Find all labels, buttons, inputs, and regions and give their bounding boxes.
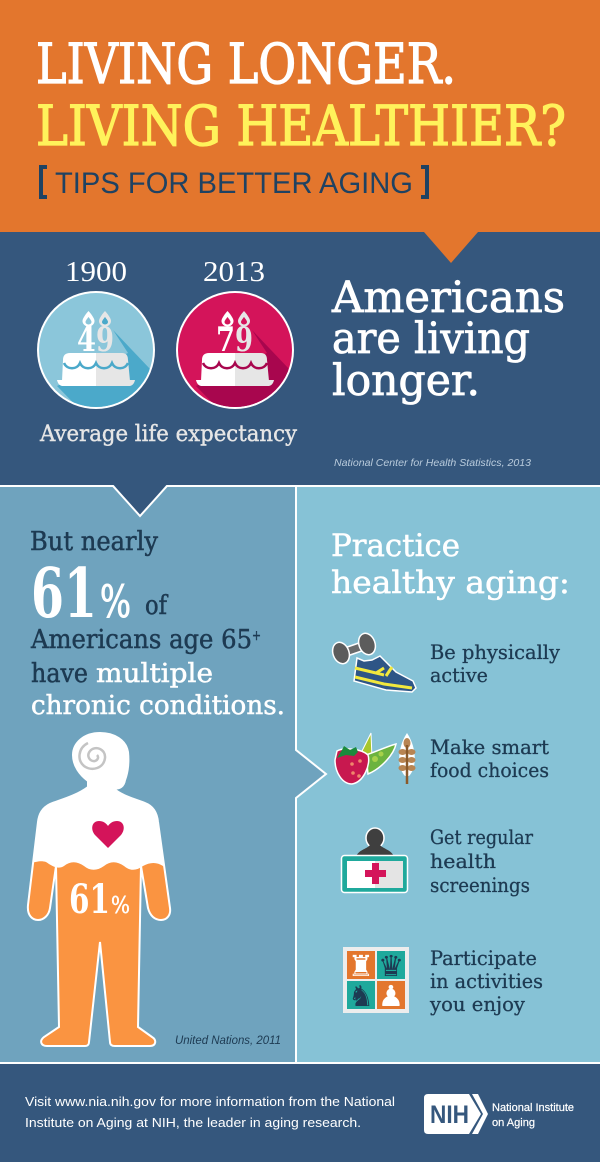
source: national center for health statistics: National Center for Health Statistics, 2013: [334, 457, 531, 469]
year 1900: 1900: [65, 256, 127, 288]
arrow: body panel into tips panel: [294, 750, 326, 798]
icon: cake 1900: 9: [96, 320, 114, 360]
logo: NIH: National Institute: [492, 1102, 574, 1114]
text: make smart food choices: food choices: [430, 758, 549, 782]
text: get regular health screenings: health: [430, 849, 496, 873]
footer: [0, 1064, 600, 1162]
title line 1: LIVING LONGER.: [36, 32, 456, 96]
heading: practice healthy aging: healthy aging:: [331, 565, 570, 601]
logo: NIH: NIH: [430, 1101, 469, 1129]
text: get regular health screenings: [430, 825, 533, 897]
heading: practice healthy aging: Practice: [331, 528, 460, 564]
text: be physically active: [430, 640, 561, 687]
heading: but nearly 61%: [30, 527, 285, 721]
footer text: [25, 1094, 395, 1130]
icon: cake 2013: 9: [235, 320, 253, 360]
icon: chess board: ♟: [378, 979, 404, 1013]
text: be physically active: Be physically: [430, 640, 561, 664]
text: participate in activities you enjoy: you enjoy: [429, 992, 526, 1016]
item: be physically active: [330, 631, 561, 692]
heading: but nearly 61%: multiple: [96, 659, 213, 689]
text: make smart food choices: [430, 735, 549, 782]
heading: but nearly 61%: %: [100, 577, 131, 628]
caption: average life expectancy: Average life expectancy: [39, 422, 298, 447]
icon: dumbbell and shoe: [330, 631, 416, 692]
right bracket: [421, 167, 427, 197]
heading: americans are living longer: are living: [332, 314, 530, 364]
heading: americans are living longer: [331, 273, 565, 406]
logo: NIH: on Aging: [492, 1117, 535, 1129]
heading: but nearly 61%: But nearly: [30, 527, 158, 557]
icon: person behind screen with cross: [342, 828, 408, 892]
heading: americans are living longer: longer.: [332, 356, 480, 406]
subtitle: TIPS FOR BETTER AGING: [55, 167, 413, 200]
icon: cake 2013: 7: [216, 320, 235, 360]
text: get regular health screenings: screenings: [430, 873, 530, 897]
icon: strawberry, pea pod and wheat: [335, 733, 416, 784]
panel: chronic conditions: [0, 485, 295, 1062]
label: 61% in body: %: [111, 893, 130, 919]
icon: chess board: ♜: [348, 949, 374, 983]
item: get regular health screenings: [342, 825, 533, 897]
heading: practice healthy aging: [331, 528, 570, 601]
heading: but nearly 61%: +: [252, 628, 261, 644]
icon: cake 1900: 4: [77, 320, 96, 360]
text: participate in activities you enjoy: [429, 946, 543, 1016]
figure: human body 61%: [26, 732, 172, 1047]
heading: but nearly 61%: have: [31, 659, 88, 689]
text: participate in activities you enjoy: in activities: [430, 969, 543, 993]
icon: heart: [92, 821, 124, 848]
heading: americans are living longer: Americans: [331, 273, 565, 323]
panel: practice healthy aging: [297, 487, 600, 1062]
year 2013: 2013: [203, 256, 265, 288]
label: 61% in body: 61: [69, 876, 110, 923]
text: make smart food choices: Make smart: [430, 735, 549, 759]
text: participate in activities you enjoy: Participate: [430, 946, 537, 970]
logo: NIH: [424, 1094, 574, 1134]
icon: cake 1900: [37, 291, 155, 409]
arrow: navy panel into body panel: [113, 484, 167, 516]
icon: chess board: [343, 947, 409, 1013]
heading: but nearly 61%: Americans age 65: [30, 625, 252, 655]
item: make smart food choices: [335, 733, 549, 784]
icon: chess board: ♛: [378, 949, 404, 983]
text: be physically active: active: [430, 663, 488, 687]
text: get regular health screenings: Get regular: [430, 825, 533, 849]
icon: cake 2013: [176, 291, 294, 409]
heading: but nearly 61%: 61: [31, 554, 97, 634]
footer text: Institute on Aging at NIH, the leader in aging research.: [25, 1115, 361, 1130]
notch from header: [424, 232, 478, 263]
footer text: Visit www.nia.nih.gov for more information from the National: [25, 1094, 395, 1109]
heading: but nearly 61%: chronic conditions.: [31, 691, 285, 721]
item: participate in activities you enjoy: [343, 946, 543, 1016]
left bracket: [41, 167, 47, 197]
heading: but nearly 61%: of: [145, 591, 169, 621]
header panel: [0, 0, 600, 232]
source: united nations: United Nations, 2011: [175, 1035, 281, 1047]
panel: americans are living longer: [37, 232, 564, 468]
icon: chess board: ♞: [348, 979, 374, 1013]
icon: spiral in head: [79, 743, 105, 769]
